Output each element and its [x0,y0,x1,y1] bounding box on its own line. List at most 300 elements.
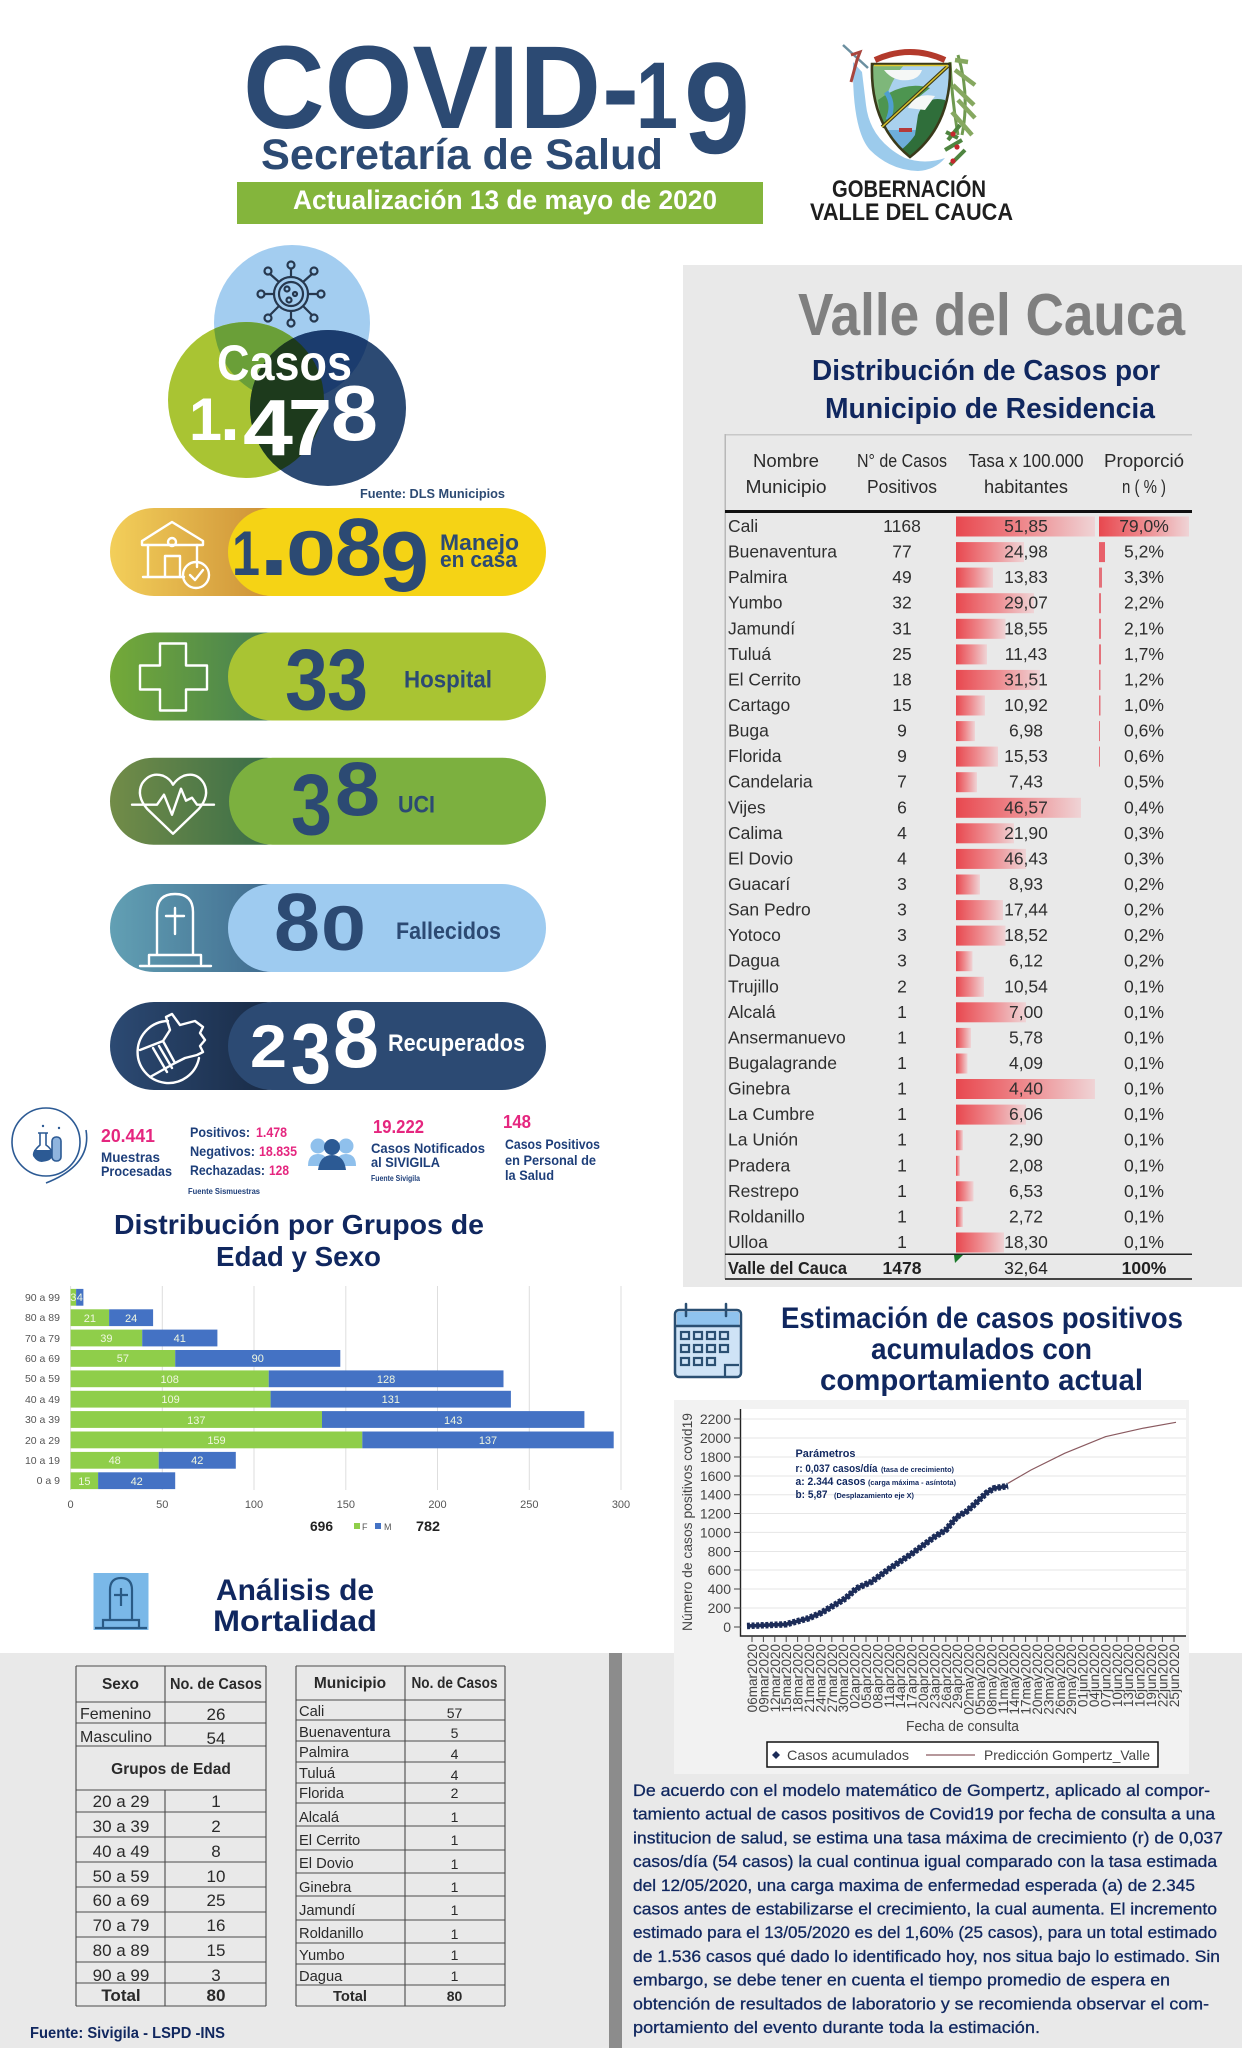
column: municipality names: Candelaria [728,772,813,792]
stat: muestras procesadas: Muestras [101,1149,160,1165]
bar chart: age and sex: 50 a 59 [25,1373,60,1385]
logo: Gobernación Valle del Cauca: VALLE DEL CAUCA [810,199,1013,226]
stat: resultados de muestras [188,1124,297,1196]
icon: flasks [12,1108,87,1183]
column: municipality names: Roldanillo [728,1206,805,1226]
column: proportion percent: 2,2% [1124,593,1164,613]
table: deaths by municipality: 1 [451,1926,459,1942]
heading: age and sex distribution: Edad y Sexo [216,1241,381,1272]
y axis labels: 2200 [700,1411,731,1427]
data bars: proportion column [1099,516,1189,767]
bar chart: age and sex: 21 [84,1313,96,1325]
column: proportion percent: 0,1% [1124,1027,1164,1047]
column: municipality names: La Unión [728,1130,798,1150]
column: municipality names: Yumbo [728,593,782,613]
x axis date labels: 14may2020 [1007,1644,1022,1715]
bar chart: age and sex: 108 [161,1374,179,1386]
source: Sivigila: Fuente: Sivigila - LSPD -INS [30,2025,225,2042]
x axis date labels: 17apr2020 [905,1644,920,1709]
y axis labels: 1000 [700,1524,731,1540]
table: deaths by municipality: 80 [447,1988,462,2004]
x axis date labels: 24mar2020 [813,1644,828,1712]
column: proportion percent [1119,516,1169,1252]
bar chart: age and sex: 20 a 29 [25,1435,60,1447]
x axis date labels: 09mar2020 [756,1644,771,1712]
column: positive cases: 1 [897,1206,907,1226]
column: municipality names: Alcalá [728,1002,776,1022]
column: positive cases: 6 [897,797,907,817]
table: deaths by municipality: 1 [451,1832,459,1848]
column: rate per 100000: 51,85 [1004,516,1048,536]
column: municipality names: Restrepo [728,1181,799,1201]
stat: casos notificados SIVIGILA [308,1117,485,1183]
x axis date labels: 14apr2020 [893,1644,908,1709]
table: sex and age of deaths: Total [101,1986,141,2005]
column: rate per 100000: 10,54 [1004,976,1048,996]
column: rate per 100000: 21,90 [1004,823,1048,843]
table: deaths by municipality: Cali [299,1704,324,1720]
venn: total cases: 4 [243,383,294,472]
bar chart: age and sex: 60 a 69 [25,1353,60,1365]
column: positive cases: 4 [897,848,907,868]
column: rate per 100000: 15,53 [1004,746,1048,766]
column: proportion percent: 0,1% [1124,1053,1164,1073]
x axis date labels: 11may2020 [996,1644,1011,1714]
title: COVID-19: - [602,22,639,154]
text block: Gompertz model explanation: de 1.536 casos qué dado lo identificado hoy, nos situa bajo lo estimado. Sin [633,1947,1220,1966]
table: deaths by municipality: El Dovio [299,1856,354,1872]
column: proportion percent: 0,1% [1124,1232,1164,1252]
column: positive cases: 25 [892,644,912,664]
column: positive cases: 15 [892,695,912,715]
bar chart: age and sex: 15 [78,1476,91,1488]
y axis labels: 1600 [700,1468,731,1484]
column: municipality names: Dagua [728,951,780,971]
text block: Gompertz model explanation: del 12/05/2020, una carga maxima de enfermedad esperada (a) de 2.345 [633,1876,1195,1895]
text block: Gompertz model explanation: tamiento actual de casos positivos de Covid19 por fecha de consulta a una [633,1805,1216,1824]
column: proportion percent: 5,2% [1124,542,1164,562]
stat: casos notificados SIVIGILA: 19.222 [373,1117,424,1137]
column: positive cases: 3 [897,874,907,894]
x axis date labels: 06mar2020 [745,1644,760,1712]
column: proportion percent: 0,1% [1124,1104,1164,1124]
x axis date labels: 23may2020 [1041,1644,1056,1715]
column: rate per 100000: 4,09 [1009,1053,1043,1073]
icon: recovered hand [138,1014,205,1083]
bar chart: age and sex: 30 a 39 [25,1414,60,1426]
stat: personal de salud: en Personal de [505,1152,596,1168]
column: proportion percent: 79,0% [1119,516,1169,536]
y axis labels: 1200 [700,1506,731,1522]
column: proportion percent: 0,1% [1124,976,1164,996]
column: municipality names: Bugalagrande [728,1053,837,1073]
bar chart: age and sex: 10 a 19 [25,1455,60,1467]
bar chart: age and sex: 90 a 99 [25,1292,60,1304]
column: positive cases: 9 [897,746,907,766]
table: deaths by municipality: Roldanillo [299,1926,364,1942]
data bars: rate column [956,516,1095,1252]
bar chart: age and sex: 0 a 9 [37,1475,60,1487]
stat: casos notificados SIVIGILA: Fuente Sivigila [371,1174,420,1183]
column: positive cases: 31 [892,618,912,638]
column: rate per 100000: 18,52 [1004,925,1048,945]
stat: resultados de muestras: Fuente Sismuestras [188,1187,261,1196]
table: deaths by municipality: 1 [451,1879,459,1895]
text block: Gompertz model explanation [633,1781,1223,2037]
table: sex and age of deaths: Femenino [80,1706,151,1723]
column: rate per 100000: 6,98 [1009,721,1043,741]
x axis date labels: 02apr2020 [848,1644,863,1709]
y axis labels: 400 [708,1581,731,1597]
table: deaths by municipality: Municipio [314,1675,386,1692]
table: sex and age of deaths: Sexo [102,1676,139,1693]
x axis date labels: 30mar2020 [836,1644,851,1712]
logo: Gobernación Valle del Cauca [810,45,1013,226]
bar chart: age and sex: 137 [187,1415,205,1427]
pill: recuperados: 8 [333,994,379,1085]
column: municipality names: Cali [728,516,758,536]
column: rate per 100000: 4,40 [1009,1078,1043,1098]
table header: Proporció [1104,451,1184,471]
column: rate per 100000: 6,53 [1009,1181,1043,1201]
cumulative cases series [747,1486,1008,1626]
x axis date labels: 25jun2020 [1167,1644,1182,1707]
stat: casos notificados SIVIGILA: al SIVIGILA [371,1154,440,1170]
venn: total cases: 1 [189,386,222,453]
venn: total cases: Casos [217,335,352,391]
pill: hospital: 3 [327,632,368,728]
table: sex and age of deaths: 80 [207,1986,225,2005]
icon: medical cross [140,644,207,710]
pill: recuperados: 3 [291,1007,331,1102]
column: positive cases: 1 [897,1027,907,1047]
column: municipality names: El Cerrito [728,669,801,689]
pill: recuperados [110,994,546,1102]
title: COVID-19: 1 [636,43,678,149]
pill: manejo en casa: en casa [440,547,518,572]
column: rate per 100000: 18,55 [1004,618,1048,638]
table: deaths by municipality: 1 [451,1809,459,1825]
column: proportion percent: 0,1% [1124,1206,1164,1226]
table header: Municipio [746,477,826,497]
table: cases by municipality [724,434,1192,1280]
column: proportion percent: 0,4% [1124,797,1164,817]
x axis date labels: 13jun2020 [1121,1644,1136,1707]
table header: n ( % ) [1122,477,1166,497]
text block: Gompertz model explanation: institucion de salud, se estima una tasa máxima de crecimiento (r) de 0,037 [633,1828,1223,1847]
x axis date labels: 04jun2020 [1087,1644,1102,1707]
column: rate per 100000: 13,83 [1004,567,1048,587]
text block: Gompertz model explanation: obtención de resultados de laboratorio y se recomienda observar el com- [633,1994,1209,2013]
column: positive cases: 49 [892,567,912,587]
x axis date labels: 18mar2020 [791,1644,806,1712]
column: municipality names: Pradera [728,1155,791,1175]
column: rate per 100000: 2,72 [1009,1206,1043,1226]
x axis date labels: 21mar2020 [802,1644,817,1712]
table: sex and age of deaths: Masculino [80,1729,152,1746]
subtitle: Secretaría de Salud: Secretaría de Salud [261,131,663,179]
parameters note: r: 0,037 casos/día [796,1463,878,1475]
date banner [237,182,763,224]
table: deaths by municipality: 5 [451,1725,459,1741]
column: rate per 100000: 24,98 [1004,542,1048,562]
table: sex and age of deaths: 2 [211,1817,221,1836]
logo: Gobernación Valle del Cauca: GOBERNACIÓN [832,175,986,203]
y axis labels: 800 [708,1544,731,1560]
chart legend [767,1742,1158,1767]
heading: mortality analysis: Análisis de [216,1574,374,1607]
column: proportion percent: 3,3% [1124,567,1164,587]
bar chart: age and sex: 200 [428,1499,447,1511]
date banner: Actualización 13 de mayo de 2020 [293,185,717,215]
bar chart: age and sex: 57 [117,1353,129,1365]
x axis date labels: 05apr2020 [859,1644,874,1709]
table: deaths by municipality: 4 [451,1746,459,1762]
bar chart: age and sex: 4 [77,1292,83,1304]
total row: 100% [1122,1258,1167,1278]
column: positive cases: 3 [897,925,907,945]
column: municipality names: San Pedro [728,900,811,920]
column: rate per 100000: 5,78 [1009,1027,1043,1047]
stat: resultados de muestras: Rechazadas: [190,1162,265,1178]
text block: Gompertz model explanation: De acuerdo con el modelo matemático de Gompertz, aplicado al compor- [633,1781,1210,1800]
table: sex and age of deaths [76,1666,266,2006]
column: positive cases: 32 [892,593,912,613]
x axis date labels: 17may2020 [1019,1644,1034,1715]
parameters note: (tasa de crecimiento) [881,1467,954,1474]
table header: Tasa x 100.000 [968,451,1084,471]
parameters note: (Desplazamiento eje X) [834,1493,914,1500]
stat: resultados de muestras: 128 [269,1162,289,1178]
pill: UCI: 8 [335,748,380,833]
heading: distribution by municipality [812,355,1160,425]
column: municipality names: Jamundí [728,618,795,638]
column: municipality names: El Dovio [728,848,793,868]
column: rate per 100000 [1004,516,1048,1252]
table: deaths by municipality: 1 [451,1902,459,1918]
column: proportion percent: 2,1% [1124,618,1164,638]
column: proportion percent: 0,2% [1124,874,1164,894]
table: deaths by municipality: Ginebra [299,1880,352,1896]
x axis date labels: 22jun2020 [1155,1644,1170,1707]
x axis title: Fecha de consulta [906,1718,1020,1735]
bar chart: age and sex: 90 [252,1353,264,1365]
column: proportion percent: 0,1% [1124,1002,1164,1022]
heading: age and sex distribution [114,1209,484,1272]
x axis date labels: 23apr2020 [927,1644,942,1709]
column: positive cases: 4 [897,823,907,843]
bar chart: age and sex: 128 [377,1374,395,1386]
pill: fallecidos: 8 [274,877,320,968]
parameters note: a: 2.344 casos [796,1476,866,1488]
column: proportion percent: 0,2% [1124,951,1164,971]
column: positive cases: 3 [897,951,907,971]
x axis date labels: 19jun2020 [1144,1644,1159,1707]
x axis date labels: 29apr2020 [950,1644,965,1709]
parameters note: Parámetros [796,1448,856,1460]
table: deaths by municipality: Florida [299,1786,345,1802]
stat: casos notificados SIVIGILA: Casos Notificados [371,1140,485,1156]
column: positive cases: 1 [897,1155,907,1175]
column: rate per 100000: 6,06 [1009,1104,1043,1124]
table: deaths by municipality: Palmira [299,1745,350,1761]
x axis date labels: 29may2020 [1064,1644,1079,1715]
table: deaths by municipality: Yumbo [299,1948,345,1964]
chart legend: Casos acumulados [787,1747,909,1763]
table: sex and age of deaths: 30 a 39 [93,1817,149,1836]
x axis date labels: 05may2020 [973,1644,988,1715]
column: rate per 100000: 46,43 [1004,848,1048,868]
column: positive cases: 2 [897,976,907,996]
column: positive cases: 1 [897,1181,907,1201]
stat: resultados de muestras: 18.835 [259,1143,297,1159]
pill: fallecidos: Fallecidos [396,918,501,945]
x axis date labels: 11apr2020 [882,1644,897,1708]
title: COVID-19: 9 [684,35,750,181]
column: municipality names: Calima [728,823,783,843]
column: positive cases: 1 [897,1130,907,1150]
column: rate per 100000: 7,00 [1009,1002,1043,1022]
column: proportion percent: 0,1% [1124,1155,1164,1175]
y axis labels: 600 [708,1562,731,1578]
heading: estimation of cases: acumulados con [871,1333,1092,1366]
legend: F and M totals: 782 [416,1518,440,1534]
table: sex and age of deaths: 40 a 49 [93,1842,149,1861]
table: sex and age of deaths: 3 [211,1966,221,1985]
bar chart: age and sex: 24 [125,1313,137,1325]
pill: manejo en casa: 8 [335,502,382,593]
pill: hospital: Hospital [404,666,492,694]
column: proportion percent: 0,3% [1124,848,1164,868]
column: rate per 100000: 29,07 [1004,593,1048,613]
heading: distribution by municipality: Municipio de Residencia [825,393,1156,425]
bar chart: age and sex: 137 [479,1435,497,1447]
column: municipality names: Guacarí [728,874,790,894]
venn: total cases: 7 [288,383,332,472]
pill: manejo en casa: Manejo [440,530,519,555]
x axis date labels [745,1644,1182,1715]
heading: estimation of cases [781,1302,1183,1397]
bar chart: age and sex: 48 [109,1455,121,1467]
table header: Positivos [867,477,937,497]
x axis date labels: 08may2020 [984,1644,999,1715]
bar chart: age and sex: 109 [161,1394,180,1406]
total row [728,1255,1167,1278]
table: sex and age of deaths: 8 [211,1842,221,1861]
table: deaths by municipality: Dagua [299,1969,343,1985]
table: deaths by municipality: 57 [447,1705,462,1721]
column: positive cases [883,516,921,1252]
column: proportion percent: 0,2% [1124,900,1164,920]
column: municipality names: Trujillo [728,976,779,996]
column: municipality names [728,516,846,1252]
legend: F and M totals [310,1518,440,1534]
column: positive cases: 7 [897,772,907,792]
parameters note [796,1448,956,1501]
title: COVID-19 [243,22,750,181]
table: deaths by municipality: Alcalá [299,1810,340,1826]
table: sex and age of deaths: 26 [207,1705,225,1724]
stat: personal de salud [503,1112,600,1183]
column: proportion percent: 1,7% [1124,644,1164,664]
icon: mortality tombstone [94,1573,148,1630]
column: proportion percent: 0,1% [1124,1130,1164,1150]
bar chart: age and sex: 250 [520,1499,538,1511]
x axis date labels: 08apr2020 [870,1644,885,1709]
bar chart: age and sex: 0 [68,1499,74,1511]
stat: muestras procesadas: Procesadas [101,1163,172,1179]
column: rate per 100000: 8,93 [1009,874,1043,894]
table: deaths by municipality: 1 [451,1947,459,1963]
column: municipality names: Tuluá [728,644,771,664]
x axis date labels: 12mar2020 [768,1644,783,1712]
icon: calendar [675,1304,741,1377]
pill: fallecidos: 0 [321,894,366,964]
column: positive cases: 1 [897,1078,907,1098]
x axis date labels: 26may2020 [1053,1644,1068,1715]
y axis labels: 1400 [700,1487,731,1503]
column: positive cases: 3 [897,900,907,920]
column: municipality names: Ulloa [728,1232,768,1252]
stat: personal de salud: la Salud [505,1167,554,1183]
table: sex and age of deaths: 15 [207,1941,225,1960]
text block: Gompertz model explanation: embargo, se debe tener en cuenta el tiempo promedio de espera en [633,1971,1170,1990]
column: proportion percent: 0,6% [1124,721,1164,741]
total row: 32,64 [1004,1258,1048,1278]
table: sex and age of deaths: Grupos de Edad [111,1761,231,1778]
heading: estimation of cases: comportamiento actual [820,1364,1143,1397]
column: municipality names: Florida [728,746,782,766]
heading: distribution by municipality: Distribución de Casos por [812,355,1160,387]
x axis date labels: 02may2020 [962,1644,977,1715]
pill: UCI [110,748,546,854]
x axis date labels: 10jun2020 [1110,1644,1125,1707]
pill: manejo en casa: 9 [380,515,429,610]
venn: total cases [168,245,406,486]
parameters note: b: 5,87 [796,1489,828,1501]
x axis date labels: 01jun2020 [1076,1644,1091,1707]
column: positive cases: 1 [897,1104,907,1124]
column: rate per 100000: 17,44 [1004,900,1048,920]
column: municipality names: La Cumbre [728,1104,815,1124]
column: rate per 100000: 10,92 [1004,695,1048,715]
column: proportion percent: 0,1% [1124,1181,1164,1201]
Gompertz prediction series [1008,1422,1176,1483]
column: positive cases: 1168 [883,516,921,536]
bar chart: age and sex: 159 [207,1435,226,1447]
legend: F and M totals: F [362,1522,368,1532]
table: sex and age of deaths: 25 [207,1891,225,1910]
pill: fallecidos [110,877,546,972]
venn: total cases: 8 [331,369,378,457]
column: proportion percent: 1,2% [1124,669,1164,689]
table: sex and age of deaths: 20 a 29 [93,1792,149,1811]
bar chart: age and sex [25,1286,630,1534]
x axis date labels: 26apr2020 [939,1644,954,1709]
heading: age and sex distribution: Distribución por Grupos de [114,1209,484,1240]
bar chart: age and sex: 42 [191,1455,203,1467]
stat: muestras procesadas [12,1108,172,1183]
column: municipality names: Palmira [728,567,788,587]
bar chart: age and sex: 70 a 79 [25,1333,60,1345]
pill: manejo en casa: . [259,485,289,597]
column: rate per 100000: 2,90 [1009,1130,1043,1150]
table: deaths by municipality: Buenaventura [299,1725,391,1741]
pill: manejo en casa: 0 [286,519,336,589]
stat: personal de salud: 148 [503,1112,531,1132]
table: deaths by municipality: Tuluá [299,1766,336,1782]
table: sex and age of deaths: 90 a 99 [93,1966,149,1985]
